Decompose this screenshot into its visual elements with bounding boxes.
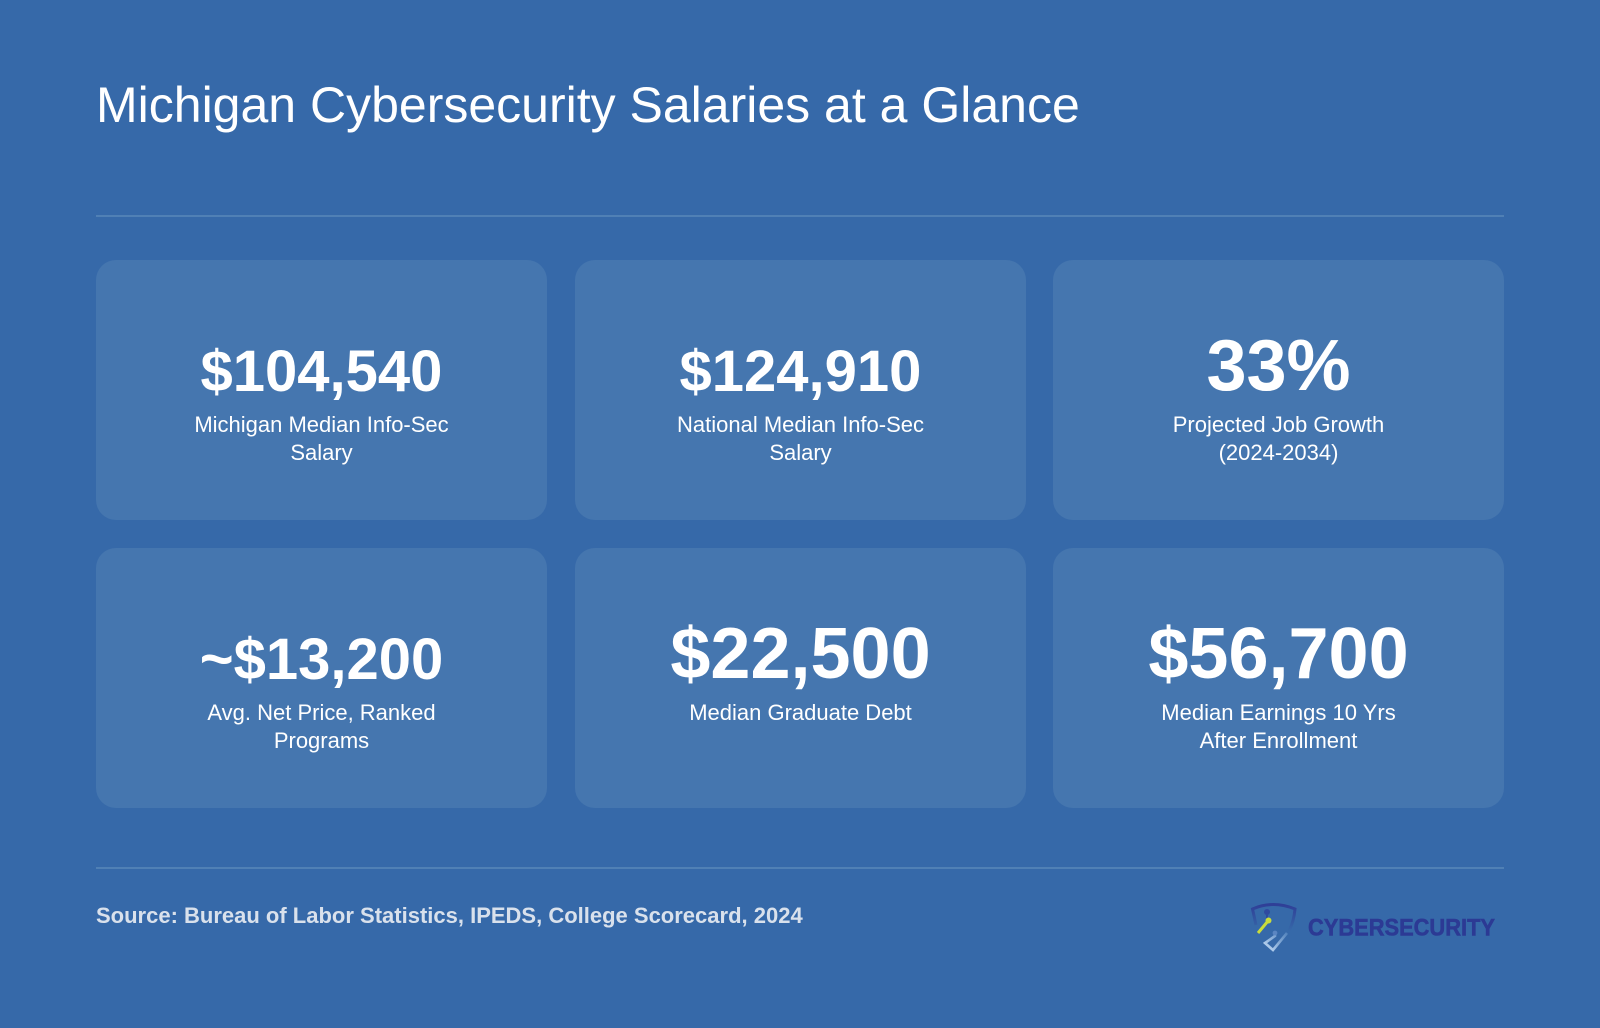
- stat value: $104,540: [201, 339, 442, 404]
- icon: shield: [1252, 904, 1295, 950]
- panel: average net price: [96, 548, 547, 808]
- stat value: ~$13,200: [200, 627, 443, 692]
- panel: median graduate debt: [575, 548, 1026, 808]
- stat label: [207, 700, 436, 753]
- stat label: After Enrollment: [1200, 728, 1357, 753]
- stat label: [194, 412, 449, 465]
- panel: median earnings: [1053, 548, 1504, 808]
- stat value: $22,500: [670, 614, 931, 694]
- panel: national median salary: [575, 260, 1026, 520]
- stat value: 33%: [1206, 326, 1351, 406]
- stat label: Michigan Median Info-Sec: [194, 412, 449, 437]
- source note: Source: Bureau of Labor Statistics, IPEDS, College Scorecard, 2024: [96, 903, 803, 928]
- stat label: Median Graduate Debt: [689, 700, 912, 725]
- stat label: [1161, 700, 1396, 753]
- logo: cybersecurity: [1250, 903, 1495, 952]
- stat label: Avg. Net Price, Ranked: [207, 700, 436, 725]
- stat label: [677, 412, 924, 465]
- panel: projected job growth: [1053, 260, 1504, 520]
- top divider: [96, 215, 1504, 217]
- stat label: Salary: [290, 440, 353, 465]
- title: Michigan Cybersecurity Salaries at a Glance: [96, 77, 1080, 133]
- stat label: Median Earnings 10 Yrs: [1161, 700, 1396, 725]
- logo wordmark: CYBERSECURITY: [1308, 914, 1495, 942]
- bottom divider: [96, 867, 1504, 869]
- stat label: Programs: [274, 728, 369, 753]
- stat label: [1173, 412, 1384, 465]
- stat value: $124,910: [680, 339, 921, 404]
- stat label: Projected Job Growth: [1173, 412, 1384, 437]
- stat label: Salary: [769, 440, 832, 465]
- stat label: (2024-2034): [1219, 440, 1338, 465]
- stat value: $56,700: [1148, 614, 1409, 694]
- panel: Michigan median salary: [96, 260, 547, 520]
- stat label: National Median Info-Sec: [677, 412, 924, 437]
